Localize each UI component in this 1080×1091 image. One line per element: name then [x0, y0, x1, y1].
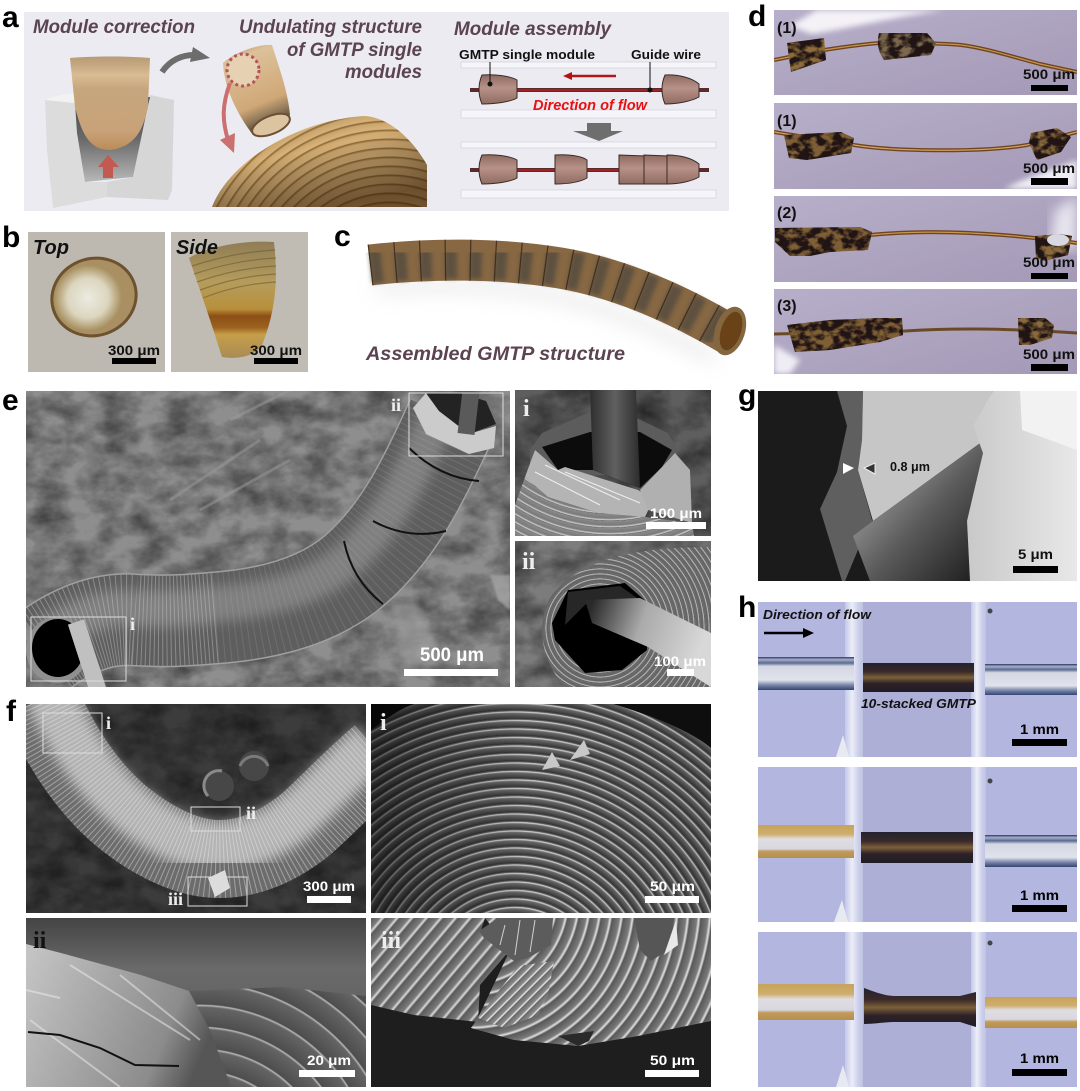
scale bar: 5 um: 5 μm	[1018, 546, 1053, 562]
scale bar: 500 um	[1024, 164, 1074, 185]
panel label f: f	[6, 695, 17, 728]
heading: Undulating structure: of GMTP single	[287, 40, 422, 61]
panel a: module schematic	[24, 12, 729, 211]
scale bar: 300 um	[303, 882, 354, 903]
scale bar: 50 um	[645, 1052, 699, 1077]
inset box ii	[409, 393, 503, 456]
panel f inset iii	[371, 918, 711, 1087]
scale bar: 500 um	[1024, 70, 1074, 91]
panel g: membrane thickness SEM	[758, 391, 1077, 581]
text: ii: ii	[33, 928, 47, 954]
scale bar: 500 um	[1024, 350, 1074, 371]
panel d row 2	[774, 103, 1077, 189]
heading: Module correction: Module correction	[33, 17, 195, 38]
text: (3): (3)	[777, 298, 797, 315]
text: 10-stacked GMTP: 10-stacked GMTP	[861, 696, 976, 711]
text: ii: ii	[522, 549, 536, 575]
inset box i	[43, 713, 102, 753]
arrow: grey down	[573, 123, 623, 141]
inset box ii	[191, 807, 240, 831]
panel label c: c	[334, 220, 351, 253]
caption: Assembled GMTP structure: Assembled GMTP structure	[365, 344, 625, 365]
ridged dome close-up	[212, 116, 427, 207]
heading: Undulating structure: Undulating structure	[239, 17, 422, 38]
scale bar: 100 um	[654, 656, 706, 676]
panel e: main SEM	[26, 390, 510, 690]
panel label b: b	[2, 221, 20, 254]
heading: Undulating structure	[239, 17, 422, 83]
inset box iii	[188, 877, 247, 906]
scale bar: 100 um: 100 μm	[650, 505, 702, 521]
scale bar: 500 um: 500 μm	[1023, 66, 1075, 82]
panel d row 1	[774, 10, 1077, 95]
heading: Module assembly: Module assembly	[454, 19, 612, 40]
scale bar: 300 um: 300 μm	[108, 342, 160, 358]
text: ii: ii	[246, 803, 256, 823]
arrow: pink curved	[224, 83, 230, 140]
scale bar: 50 um: 50 μm	[650, 878, 695, 894]
text: iii: iii	[168, 889, 183, 909]
scale bar: 1 mm	[1012, 887, 1067, 912]
scale bar: 1 mm: 1 mm	[1020, 1050, 1059, 1066]
heading: Undulating structure: modules	[345, 62, 422, 83]
panel label d: d	[748, 0, 766, 33]
assembly diagram: after	[461, 142, 716, 198]
panel f: main SEM	[26, 692, 380, 913]
scale bar: 50 um: 50 μm	[650, 1052, 695, 1068]
scale bar: 1 mm	[1012, 1050, 1067, 1076]
module correction holder and cup	[45, 56, 174, 208]
scale bar: 5 um	[1013, 546, 1058, 573]
panel b: top view	[28, 232, 165, 372]
text: (2): (2)	[777, 205, 797, 222]
scale bar: 1 mm: 1 mm	[1020, 721, 1059, 737]
label: Guide wire: Guide wire	[631, 47, 701, 62]
panel h row 1	[758, 602, 1077, 757]
scale bar: 20 um: 20 μm	[307, 1052, 351, 1068]
text: ii: ii	[391, 395, 401, 415]
text: i: i	[130, 614, 135, 634]
scale bar: 500 um	[404, 645, 498, 676]
scale bar: 300 um: 300 μm	[303, 878, 355, 894]
panel c: assembled tube	[370, 260, 752, 359]
arrow: curved grey	[162, 55, 194, 72]
panel b: side view	[171, 232, 308, 372]
scale bar: 500 um: 500 μm	[1023, 160, 1075, 176]
scale bar: 500 um: 500 μm	[1023, 254, 1075, 270]
text: i: i	[380, 710, 387, 736]
panel label e: e	[2, 384, 19, 417]
scale bar: 100 um: 100 μm	[654, 653, 706, 669]
scale bar: 500 um: 500 μm	[1023, 346, 1075, 362]
text: Top: Top	[33, 237, 69, 259]
inset box i	[31, 617, 126, 681]
arrow head: pink	[220, 133, 235, 153]
text: iii: iii	[381, 928, 401, 954]
panel d row 3	[774, 196, 1077, 282]
tilted single module	[223, 45, 293, 141]
panel e inset i	[515, 390, 711, 536]
text: (1): (1)	[777, 113, 797, 130]
scale bar: 1 mm: 1 mm	[1020, 887, 1059, 903]
panel f inset ii	[26, 918, 366, 1087]
scale bar: 1 mm	[1012, 721, 1067, 746]
label: Direction of flow: Direction of flow	[533, 97, 648, 114]
text: i: i	[106, 713, 111, 733]
panel d row 4	[774, 289, 1077, 374]
text: Direction of flow: Direction of flow	[763, 607, 872, 622]
arrow head: grey	[190, 47, 210, 62]
scale bar: 100 um	[646, 508, 706, 529]
assembly diagram: before	[461, 62, 716, 118]
label: GMTP single module: GMTP single module	[459, 47, 595, 62]
text: i: i	[523, 396, 530, 422]
scale bar: 500 um: 500 μm	[420, 645, 484, 666]
text: 0.8 um: 0.8 μm	[890, 459, 930, 474]
scale bar: 50 um	[645, 882, 699, 903]
panel label a: a	[2, 1, 19, 34]
text: Side: Side	[176, 237, 218, 259]
scale bar: 500 um	[1024, 258, 1074, 279]
text: (1): (1)	[777, 20, 797, 37]
panel label h: h	[738, 591, 756, 624]
panel h row 2	[758, 767, 1077, 922]
scale bar: 20 um	[299, 1056, 355, 1077]
panel f inset i	[371, 704, 711, 913]
scale bar: 300 um: 300 μm	[250, 342, 302, 358]
panel h row 3	[758, 932, 1077, 1087]
panel e inset ii	[515, 541, 711, 687]
arrow: flow direction	[764, 628, 814, 638]
panel label g: g	[738, 379, 756, 412]
